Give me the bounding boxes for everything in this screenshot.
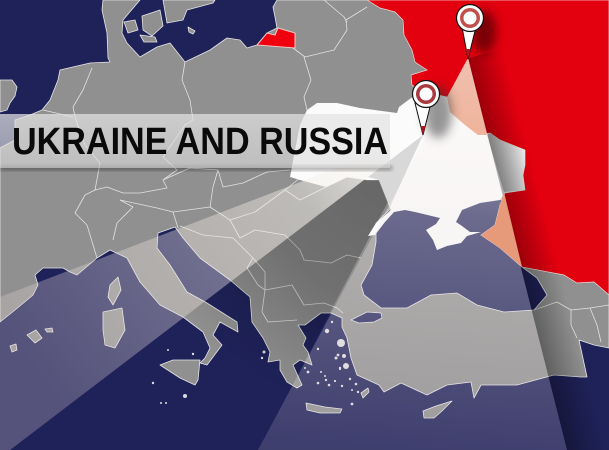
lit Russia inside beam, Kuban: [481, 192, 522, 267]
title: UKRAINE AND RUSSIA: [12, 121, 388, 163]
United Kingdom: [0, 80, 17, 112]
Sardinia: [103, 308, 125, 348]
Balearic islands: [10, 328, 53, 352]
shadow on east Ukraine: [487, 133, 525, 192]
Ukraine: [290, 92, 525, 250]
Corsica: [108, 277, 121, 305]
Sicily: [160, 360, 200, 385]
shadow beneath lower pin: [424, 86, 452, 138]
banner shadow: [0, 166, 392, 170]
Crete: [306, 403, 342, 413]
national borders: [43, 0, 609, 342]
Russia: [367, 0, 609, 295]
soft shade over central Ukraine: [368, 135, 423, 207]
pin: Ukraine: [412, 80, 440, 135]
Sweden: [163, 0, 215, 23]
Aegean islands: [152, 321, 359, 405]
shadow behind west beam: [10, 135, 423, 450]
shadow beneath upper pin: [472, 10, 496, 54]
title banner: [0, 114, 390, 168]
lit Russia inside beam, north of Ukraine: [447, 58, 487, 135]
Kaliningrad: [257, 28, 295, 48]
beam: towards western Europe: [0, 135, 423, 450]
pin: Russia: [456, 4, 484, 59]
shadow next to east beam: [468, 20, 609, 450]
beam: towards south: [258, 58, 567, 450]
Cyprus: [423, 401, 452, 418]
Rhodes: [361, 388, 369, 398]
Sea of Marmara: [351, 312, 382, 323]
Black Sea and Sea of Azov: [361, 198, 547, 312]
Danish islands: [124, 10, 195, 42]
